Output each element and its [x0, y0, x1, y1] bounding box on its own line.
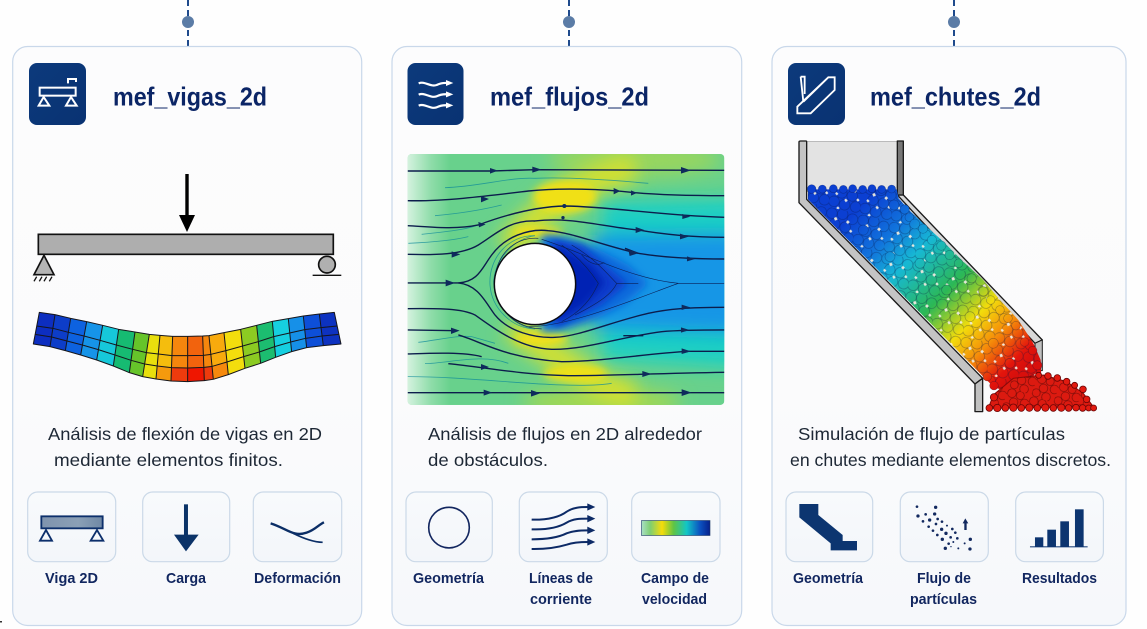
feature: Campo de velocidad: velocidad [642, 591, 707, 608]
feature: Carga: Carga [166, 570, 207, 587]
feature: Resultados bars: Resultados [1022, 570, 1097, 587]
icon: chute header [788, 63, 845, 125]
panel: mef_vigas_2d [13, 46, 362, 626]
description [48, 424, 322, 470]
feature: Deformación: Deformación [254, 570, 341, 587]
feature: Campo de velocidad: Campo de [641, 570, 709, 587]
heading: mef_vigas_2d [113, 82, 267, 112]
description: de obstáculos. [428, 450, 548, 470]
feature: Flujo de partículas [900, 492, 988, 608]
feature: Líneas de corriente: corriente [530, 591, 592, 608]
feature: Flujo de partículas: Flujo de [917, 570, 971, 587]
icon: beam header [29, 63, 86, 125]
feature: Deformación [253, 492, 342, 587]
feature: Geometría chute [786, 492, 873, 587]
feature: Líneas de corriente: Líneas de [529, 570, 593, 587]
description: en chutes mediante elementos discretos. [790, 450, 1111, 470]
connector: flujos [563, 0, 575, 46]
connector: vigas [182, 0, 194, 46]
description: Simulación de flujo de partículas [798, 424, 1065, 444]
description: mediante elementos finitos. [54, 450, 283, 470]
deformed beam mesh [33, 312, 341, 382]
particle pile [986, 372, 1097, 412]
description: Análisis de flujos en 2D alrededor [428, 424, 702, 444]
feature: Resultados bars [1016, 492, 1103, 587]
panel: mef_chutes_2d [772, 46, 1126, 626]
heading: mef_flujos_2d [490, 82, 649, 112]
feature: Geometría chute: Geometría [793, 570, 864, 587]
feature: Carga [143, 492, 230, 587]
feature: Flujo de partículas: partículas [910, 591, 977, 608]
flow field chart [408, 154, 724, 405]
description: Análisis de flexión de vigas en 2D [48, 424, 322, 444]
panel: mef_flujos_2d [392, 46, 742, 626]
icon: flow header [408, 63, 464, 125]
feature: Campo de velocidad [632, 492, 720, 608]
beam diagram [34, 174, 341, 281]
description [790, 424, 1111, 470]
heading: mef_chutes_2d [870, 82, 1041, 112]
card background [392, 46, 742, 626]
chute particle simulation [799, 141, 1097, 412]
hopper interior [807, 142, 898, 192]
feature: Geometría circle [406, 492, 492, 587]
particle mass [807, 185, 1042, 393]
description [428, 424, 702, 470]
connector: chutes [948, 0, 960, 46]
chute walls [799, 141, 1042, 412]
card background [13, 46, 362, 626]
card background [772, 46, 1126, 626]
feature: Geometría circle: Geometría [413, 570, 485, 587]
feature: Viga 2D: Viga 2D [45, 570, 98, 587]
feature: Viga 2D [28, 492, 116, 587]
feature: Líneas de corriente [519, 492, 607, 608]
